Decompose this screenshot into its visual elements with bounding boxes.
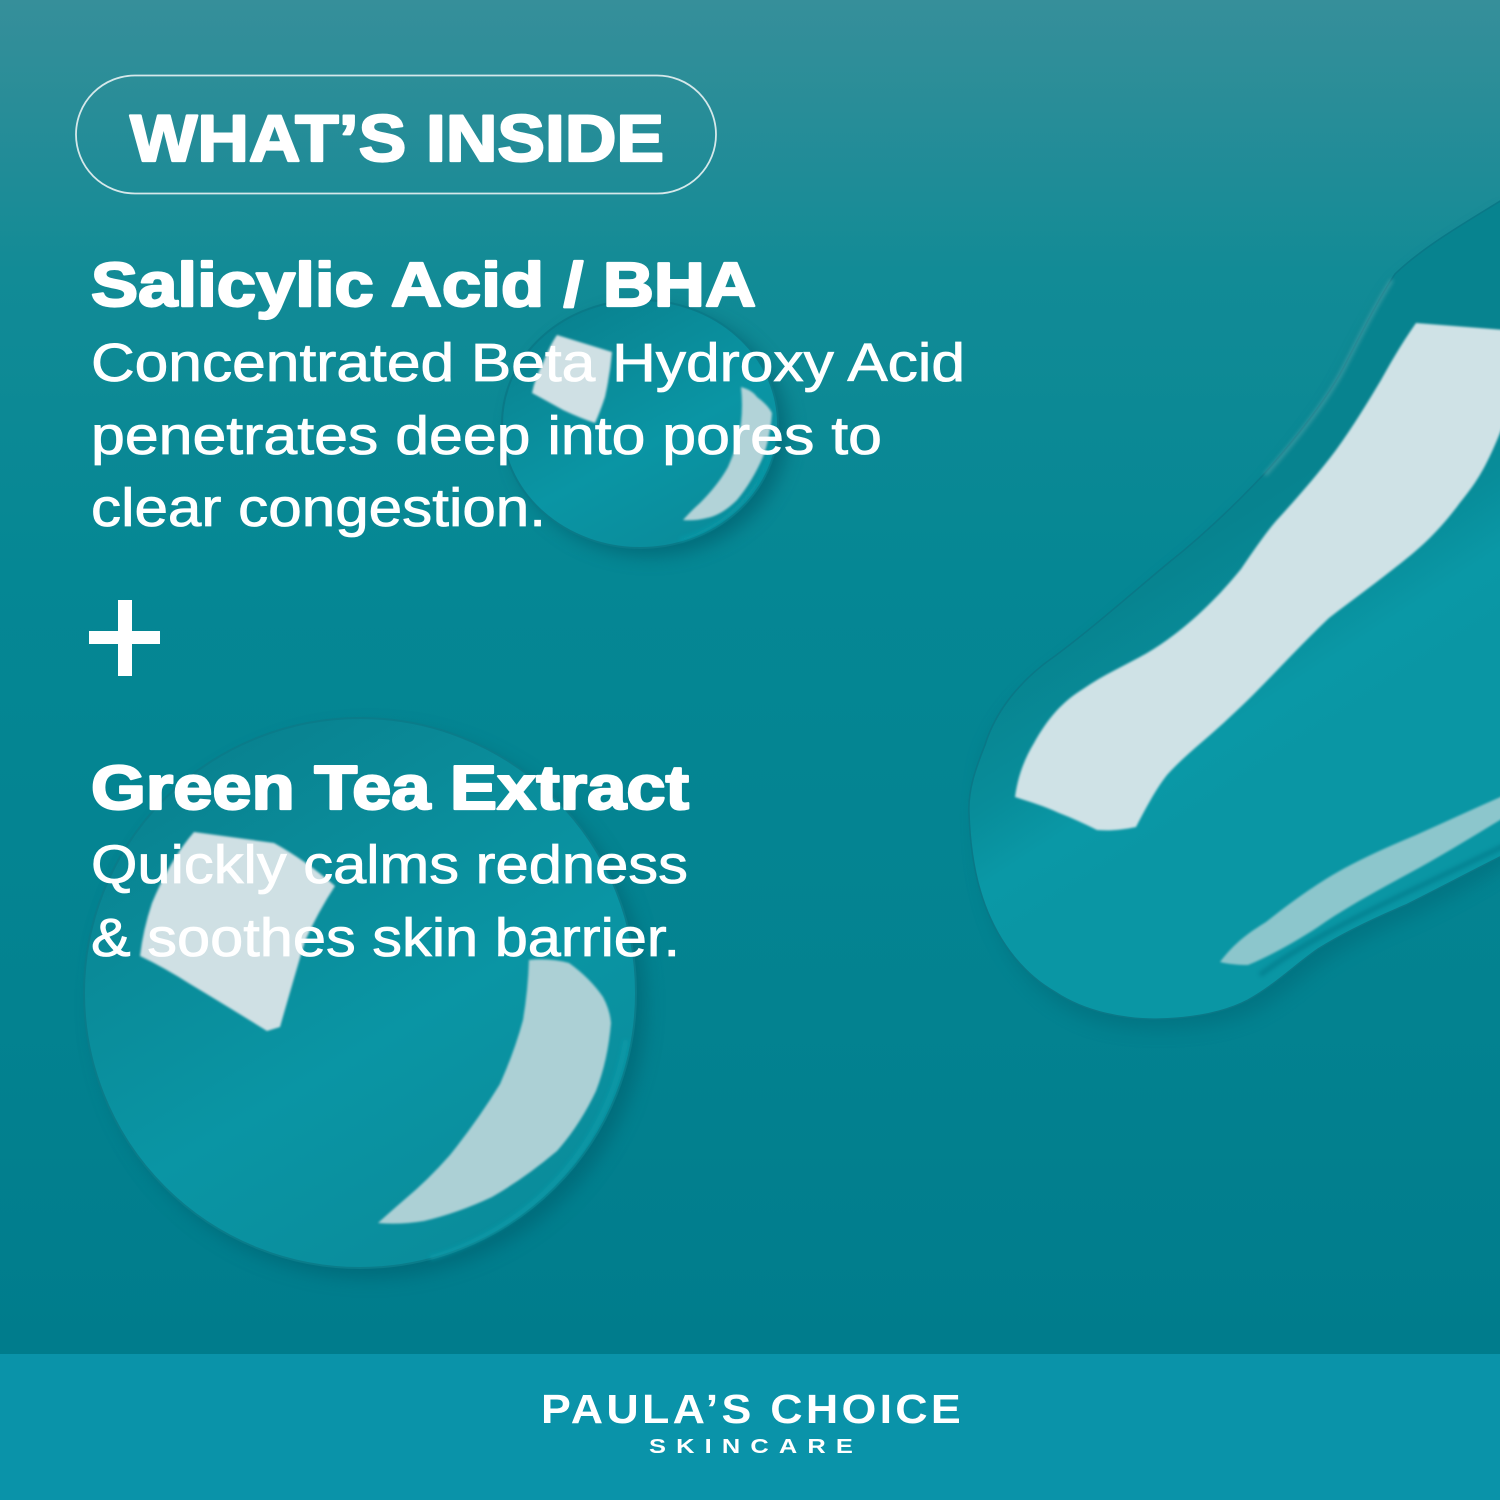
large gel smear xyxy=(969,195,1500,1029)
title pill xyxy=(76,76,716,194)
lower dark band xyxy=(1260,843,1500,975)
logo xyxy=(541,1386,964,1458)
text block: green tea description: & soothes skin barrier. xyxy=(91,908,680,968)
text block: salicylic acid description xyxy=(91,333,965,538)
highlight: small droplet window xyxy=(532,335,612,423)
logo: PAULA’S CHOICE xyxy=(541,1386,964,1432)
small droplet xyxy=(502,300,788,556)
highlight: large droplet window xyxy=(140,832,335,1031)
rim: large droplet xyxy=(430,1040,626,1258)
rim light xyxy=(1265,280,1392,475)
title: WHAT’S INSIDE xyxy=(130,101,664,175)
heading: salicylic acid: Salicylic Acid / BHA xyxy=(91,251,756,320)
highlight: large droplet crescent xyxy=(378,959,611,1224)
text block: salicylic acid description: clear congestion. xyxy=(91,478,546,538)
text block: salicylic acid description: Concentrated Beta Hydroxy Acid xyxy=(91,333,965,393)
heading: green tea: Green Tea Extract xyxy=(91,754,689,823)
large droplet xyxy=(84,718,646,1278)
icon: plus xyxy=(89,600,160,676)
footer band xyxy=(0,1354,1500,1500)
logo: SKINCARE xyxy=(649,1436,863,1458)
rim: small droplet xyxy=(680,445,772,540)
highlight: small droplet crescent xyxy=(683,387,772,520)
highlight: lower reflection xyxy=(1220,795,1500,965)
text block: salicylic acid description: penetrates deep into pores to xyxy=(91,406,882,466)
text block: green tea description: Quickly calms redness xyxy=(91,835,688,895)
text block: green tea description xyxy=(91,835,688,968)
highlight: main reflection xyxy=(1015,323,1500,830)
